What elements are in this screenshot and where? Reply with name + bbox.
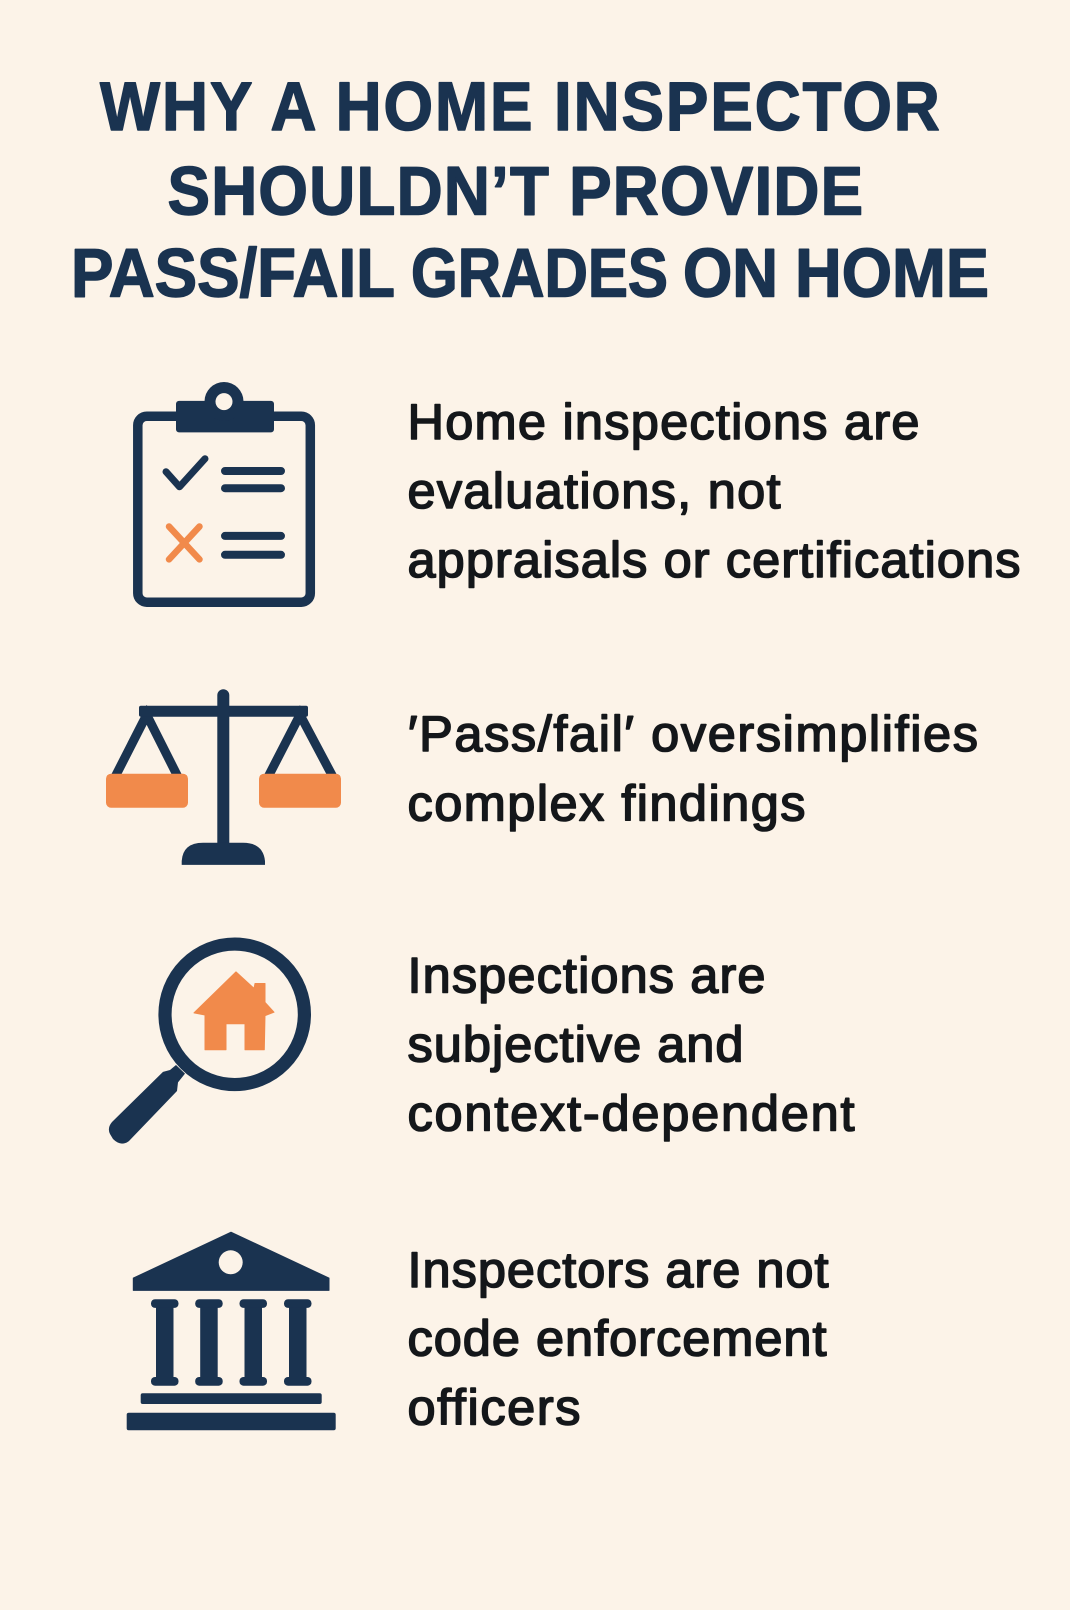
text: not code enforcement officers	[408, 1241, 828, 1436]
text: subjective and context-dependent	[408, 946, 854, 1142]
text: subjective and context-dependent: subjective and	[408, 1016, 744, 1072]
title: HOME	[795, 234, 989, 312]
text: pass/fail oversimplifies: complex findings	[408, 774, 806, 832]
text: inspections are evaluations: evaluations, not	[408, 462, 780, 519]
text: pass/fail oversimplifies: ′Pass/fail′ oversimplifies	[408, 705, 978, 762]
title: GRADES	[411, 234, 668, 312]
title	[71, 69, 989, 312]
icon: balance scale	[106, 689, 341, 865]
title: WHY A HOME INSPECTOR	[100, 69, 940, 146]
text: not code enforcement officers: Inspectors are not	[408, 1241, 828, 1298]
text: subjective and context-dependent: context-dependent	[408, 1084, 854, 1142]
icon: clipboard checklist	[138, 382, 310, 602]
title: ON	[683, 234, 778, 312]
text: pass/fail oversimplifies	[408, 705, 978, 832]
icon: magnifying glass over house	[109, 944, 304, 1144]
text: subjective and context-dependent: Inspections are	[408, 946, 766, 1004]
title: PASS/FAIL	[71, 234, 395, 312]
text: inspections are evaluations: appraisals or certifications	[408, 531, 1020, 588]
title: SHOULDN’T PROVIDE	[168, 153, 863, 230]
text: inspections are evaluations	[408, 393, 1020, 588]
text: not code enforcement officers: officers	[408, 1378, 580, 1436]
text: inspections are evaluations: Home inspections are	[408, 393, 920, 450]
text: not code enforcement officers: code enforcement	[408, 1310, 826, 1366]
icon: government building	[127, 1232, 336, 1430]
